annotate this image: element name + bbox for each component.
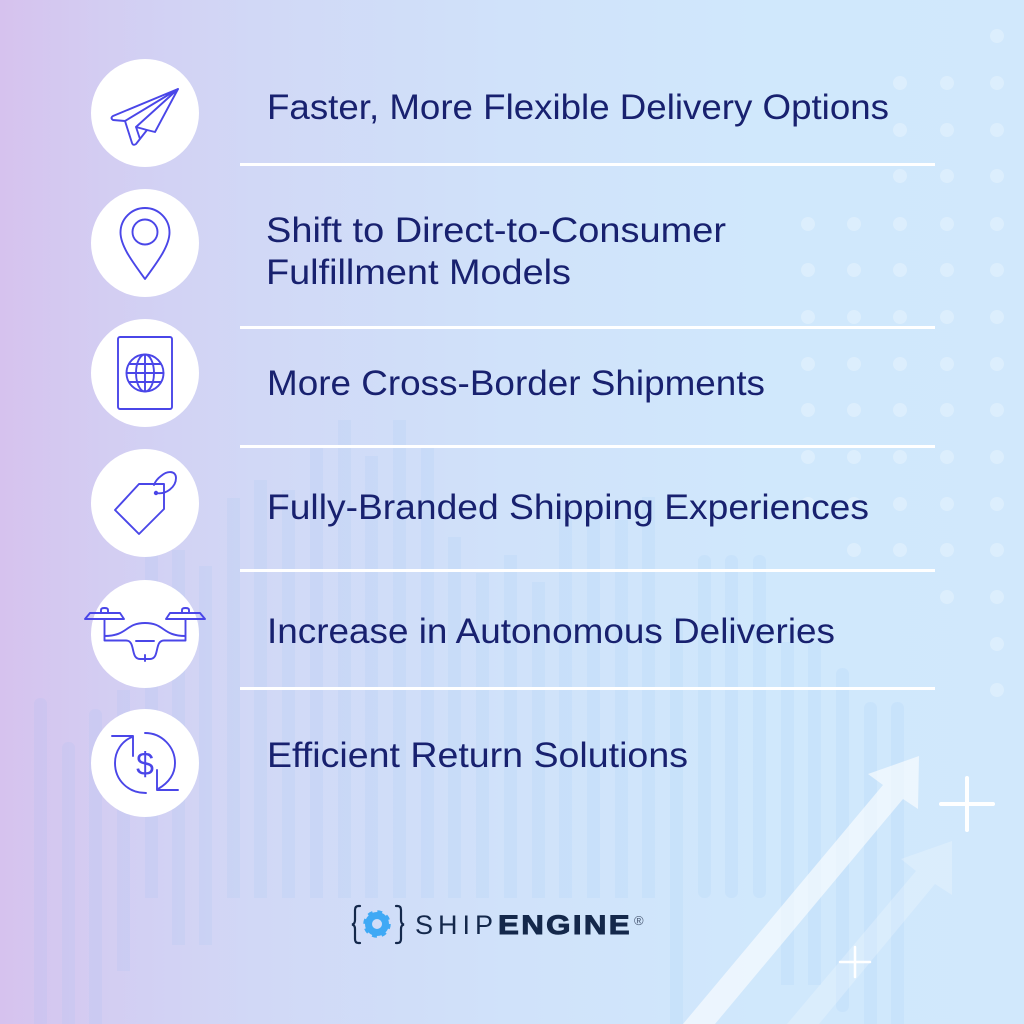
row 3: cross-border — [91, 319, 765, 427]
heading: fulfillment models: Fulfillment Models — [266, 252, 571, 292]
background bar chart pattern — [34, 420, 904, 1024]
icon circle: price tag — [91, 449, 199, 557]
divider lines — [240, 163, 935, 690]
row 4: branded experiences — [91, 449, 869, 557]
logo braces — [352, 906, 404, 943]
icon circle: drone — [85, 580, 205, 688]
large rising arrow — [683, 756, 919, 1024]
heading: autonomous: Increase in Autonomous Deliveries — [267, 611, 835, 651]
row 1: delivery options — [91, 59, 889, 167]
icon circle: returns dollar — [91, 709, 199, 817]
icon circle: map pin — [91, 189, 199, 297]
large plus sign — [941, 778, 993, 830]
heading: returns: Efficient Return Solutions — [267, 735, 688, 775]
heading: faster delivery: Faster, More Flexible Delivery Options — [267, 87, 889, 127]
row 2: direct to consumer — [91, 189, 726, 297]
icon circle: paper plane — [91, 59, 199, 167]
heading: cross-border: More Cross-Border Shipments — [267, 363, 765, 403]
logo gear — [365, 912, 389, 936]
ShipEngine logo: ENGINE — [498, 910, 632, 940]
heading: direct to consumer: Shift to Direct-to-Consumer — [266, 210, 726, 250]
icon circle: passport — [91, 319, 199, 427]
row 6: returns — [91, 709, 688, 817]
ShipEngine logo — [352, 906, 644, 943]
background dot grid — [801, 29, 1004, 697]
ShipEngine logo: ® — [634, 913, 644, 928]
small plus sign — [840, 947, 870, 977]
icon circle: returns dollar: $ — [136, 746, 154, 782]
heading: branded: Fully-Branded Shipping Experiences — [267, 487, 869, 527]
small rising arrow — [787, 841, 952, 1024]
row 5: autonomous deliveries — [85, 580, 835, 688]
logo wordmark: SHIP — [415, 910, 493, 940]
